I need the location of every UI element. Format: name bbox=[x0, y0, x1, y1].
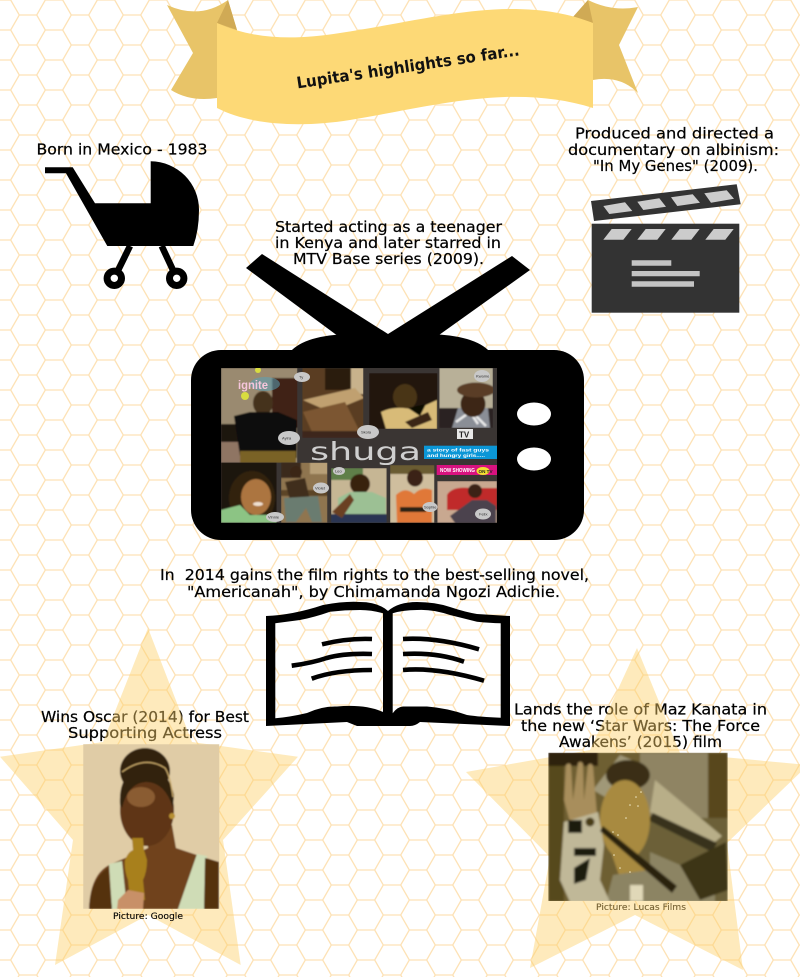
text: Star Wars role: Awakens’ (2015) film bbox=[559, 733, 722, 751]
icon: television bbox=[191, 254, 584, 540]
text: documentary: "In My Genes" (2009). bbox=[593, 157, 758, 175]
text: Star Wars role: Lands the role of Maz Kanata in bbox=[514, 700, 767, 718]
poster label: now showing: NOW SHOWING bbox=[440, 468, 475, 474]
text: born in Mexico: Born in Mexico - 1983 bbox=[36, 140, 208, 158]
title banner bbox=[167, 0, 638, 124]
text: film rights: "Americanah", by Chimamanda Ngozi Adichie. bbox=[187, 583, 560, 601]
text: film rights bbox=[160, 566, 589, 601]
text: film rights: In 2014 gains the film rights to the best-selling novel, bbox=[160, 566, 589, 584]
poster tagline box bbox=[424, 446, 497, 459]
text: Star Wars role: the new ‘Star Wars: The Force bbox=[521, 717, 760, 735]
text: wins Oscar: Supporting Actress bbox=[68, 724, 222, 742]
poster label: MTV: TV bbox=[459, 430, 470, 440]
text: documentary bbox=[568, 124, 779, 175]
TV button lower bbox=[517, 448, 551, 470]
poster label: ignite: ignite bbox=[238, 378, 268, 392]
poster name ovals: Skola bbox=[361, 430, 372, 434]
Shuga poster on screen bbox=[221, 367, 497, 525]
text: documentary: Produced and directed a bbox=[575, 124, 774, 142]
poster name ovals: Leo bbox=[335, 468, 342, 474]
title: Lupita's highlights so far... bbox=[295, 40, 521, 92]
text: started acting: MTV Base series (2009). bbox=[293, 250, 484, 268]
caption: Lucas Films: Picture: Lucas Films bbox=[596, 903, 687, 913]
icon: open book bbox=[266, 602, 510, 726]
poster name ovals: Violet bbox=[315, 486, 326, 490]
text: wins Oscar: Wins Oscar (2014) for Best bbox=[41, 708, 249, 726]
poster name ovals bbox=[266, 370, 491, 522]
photo: motion capture bbox=[548, 752, 728, 901]
caption: Google: Picture: Google bbox=[113, 912, 183, 922]
poster name ovals: Ty bbox=[299, 374, 303, 380]
icon: film clapperboard bbox=[591, 184, 741, 313]
TV button bbox=[517, 402, 551, 426]
text: wins Oscar bbox=[41, 708, 249, 742]
star: right bbox=[466, 648, 800, 970]
text: Star Wars role bbox=[514, 700, 767, 751]
poster name ovals: Kwame bbox=[476, 374, 490, 378]
poster name ovals: Vinnie bbox=[268, 514, 280, 520]
poster label: MTV bbox=[457, 429, 473, 440]
poster name ovals: Ayira bbox=[282, 436, 292, 440]
poster name ovals: Sophie bbox=[424, 504, 437, 510]
poster tagline box: a story of fast guys bbox=[427, 448, 490, 452]
text: started acting bbox=[275, 218, 503, 268]
star: left bbox=[0, 628, 298, 965]
icon: baby stroller bbox=[45, 161, 199, 285]
text: started acting: in Kenya and later starred in bbox=[275, 234, 501, 252]
poster label: shuga: shuga bbox=[310, 437, 421, 466]
poster tagline box: and hungry girls..... bbox=[427, 453, 485, 458]
poster label: now showing bbox=[440, 467, 493, 475]
poster label: now showing: ON TV bbox=[478, 469, 493, 474]
text: started acting: Started acting as a teenager bbox=[275, 218, 503, 236]
poster name ovals: Felix bbox=[479, 512, 487, 516]
text: documentary: documentary on albinism: bbox=[568, 141, 779, 159]
photo: Oscar winner bbox=[83, 744, 220, 909]
